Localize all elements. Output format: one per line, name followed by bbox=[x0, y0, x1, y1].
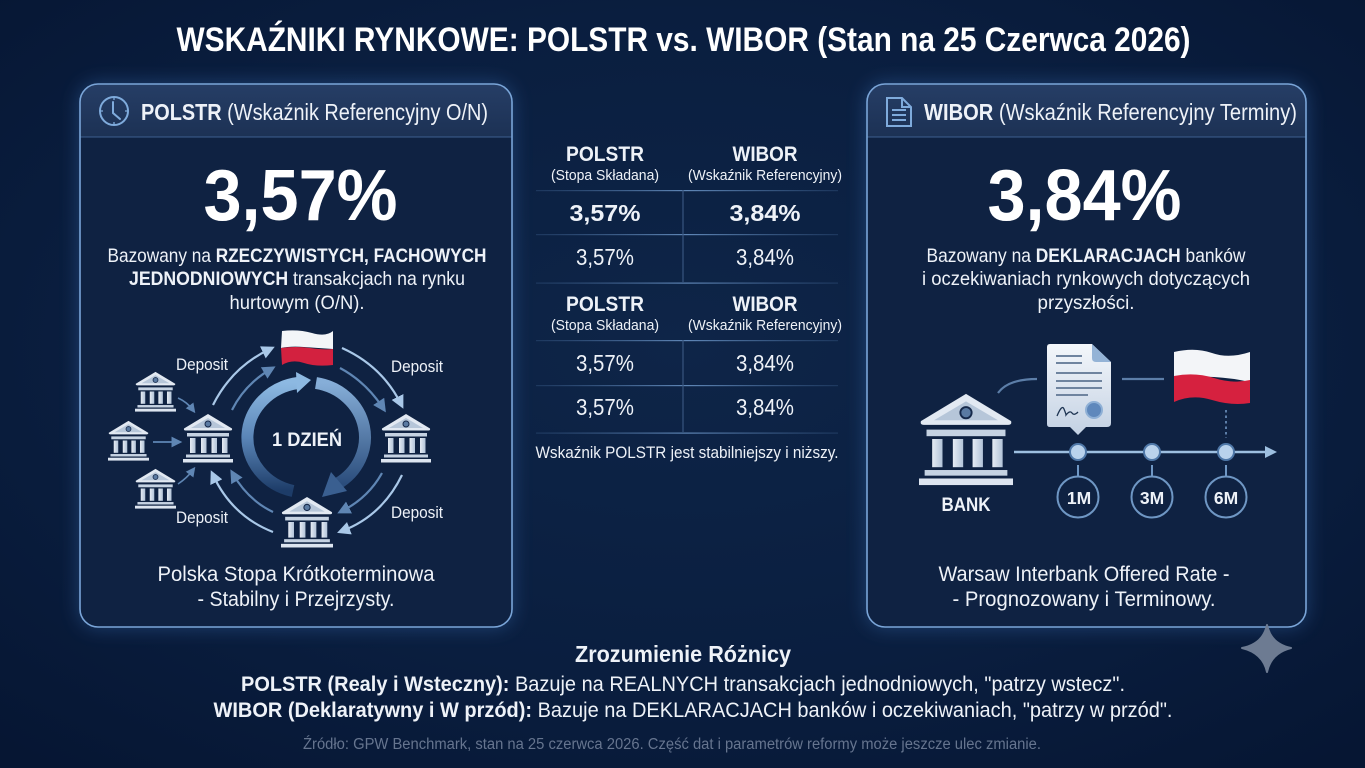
table rows 2 bbox=[576, 350, 794, 420]
description: WIBOR: przyszłości. bbox=[1038, 292, 1134, 314]
deposit labels: Deposit bbox=[391, 358, 443, 376]
icon: bank nodes bbox=[108, 372, 431, 547]
table header 1: WIBOR bbox=[732, 142, 798, 166]
description: POLSTR: hurtowym (O/N). bbox=[230, 292, 364, 314]
diagram: one-day cycle bbox=[108, 330, 443, 547]
deposit labels: Deposit bbox=[176, 509, 228, 527]
summary line WIBOR: WIBOR (Deklaratywny i W przód): Bazuje na DEKLARACJACH banków i oczekiwaniach, "patrzy w przód". bbox=[214, 698, 1172, 722]
description: POLSTR: Bazowany na RZECZYWISTYCH, FACHOWYCH bbox=[108, 245, 486, 267]
caption: POLSTR: - Stabilny i Przejrzysty. bbox=[198, 588, 394, 611]
summary line POLSTR: POLSTR (Realy i Wsteczny): Bazuje na REALNYCH transakcjach jednodniowych, "patrzy wstecz". bbox=[241, 672, 1125, 696]
panel header: WIBOR: WIBOR (Wskaźnik Referencyjny Terminy) bbox=[924, 99, 1297, 125]
table note: Wskaźnik POLSTR jest stabilniejszy i niższy. bbox=[536, 444, 838, 462]
summary heading: Zrozumienie Różnicy bbox=[575, 641, 791, 667]
table header 2: WIBOR bbox=[732, 292, 798, 316]
table rows 2: 3,57% bbox=[576, 350, 634, 376]
description: POLSTR: JEDNODNIOWYCH transakcjach na rynku bbox=[129, 268, 465, 290]
icon: document bbox=[887, 98, 911, 126]
description: WIBOR: Bazowany na DEKLARACJACH banków bbox=[926, 245, 1246, 267]
big value: POLSTR: 3,57% bbox=[204, 156, 398, 236]
source note: Źródło: GPW Benchmark, stan na 25 czerwca 2026. Część dat i parametrów reformy może jeszcze ulec zmianie. bbox=[303, 736, 1041, 753]
bank label: BANK bbox=[942, 494, 990, 516]
table header 1: (Wskaźnik Referencyjny) bbox=[688, 168, 842, 184]
icon: Polish flag bbox=[1174, 350, 1250, 404]
timeline: 6M bbox=[1214, 488, 1238, 508]
ring arrows bbox=[247, 372, 365, 497]
icon: bank bbox=[919, 394, 1013, 485]
deposit labels bbox=[176, 356, 443, 527]
table rows 1: 3,57% bbox=[570, 200, 641, 226]
timeline: 1M bbox=[1067, 488, 1091, 508]
table header 2 bbox=[551, 292, 842, 334]
caption: POLSTR: Polska Stopa Krótkoterminowa bbox=[158, 563, 435, 586]
timeline: 3M bbox=[1140, 488, 1164, 508]
table rows 2: 3,84% bbox=[736, 350, 794, 376]
icon: signed document bbox=[1047, 344, 1111, 435]
connectors bbox=[998, 379, 1226, 438]
icon: clock bbox=[100, 97, 128, 125]
table rows 1: 3,84% bbox=[730, 200, 801, 226]
big value: WIBOR: 3,84% bbox=[988, 156, 1182, 236]
description: WIBOR bbox=[922, 245, 1250, 314]
table header 1: POLSTR bbox=[566, 142, 644, 166]
timeline bbox=[1014, 444, 1277, 518]
icon: Polish flag bbox=[281, 330, 333, 366]
table rows 1 bbox=[570, 200, 801, 270]
panel header: POLSTR: POLSTR (Wskaźnik Referencyjny O/N) bbox=[141, 99, 488, 125]
table rows 2: 3,84% bbox=[736, 394, 794, 420]
table header 2: (Wskaźnik Referencyjny) bbox=[688, 318, 842, 334]
center label: 1 DZIEŃ bbox=[272, 428, 342, 451]
icon: sparkle bbox=[1242, 625, 1291, 672]
table header 1 bbox=[551, 142, 842, 184]
table rows 1: 3,57% bbox=[576, 244, 634, 270]
deposit labels: Deposit bbox=[391, 504, 443, 522]
panel: WIBOR bbox=[865, 82, 1308, 629]
comparison table bbox=[536, 142, 842, 462]
description: POLSTR bbox=[108, 245, 486, 314]
table header 2: POLSTR bbox=[566, 292, 644, 316]
circulating arrows bbox=[153, 348, 402, 532]
caption: WIBOR bbox=[938, 563, 1230, 611]
diagram: tenor timeline bbox=[919, 344, 1277, 518]
caption: POLSTR bbox=[158, 563, 435, 611]
title: WSKAŹNIKI RYNKOWE: POLSTR vs. WIBOR (Stan na 25 Czerwca 2026) bbox=[176, 21, 1190, 59]
table header 1: (Stopa Składana) bbox=[551, 168, 659, 184]
summary bbox=[214, 641, 1172, 753]
table rows 1: 3,84% bbox=[736, 244, 794, 270]
deposit labels: Deposit bbox=[176, 356, 228, 374]
description: WIBOR: i oczekiwaniach rynkowych dotyczących bbox=[922, 268, 1250, 290]
table header 2: (Stopa Składana) bbox=[551, 318, 659, 334]
panel: POLSTR bbox=[78, 82, 514, 629]
table rows 2: 3,57% bbox=[576, 394, 634, 420]
caption: WIBOR: Warsaw Interbank Offered Rate - bbox=[938, 563, 1230, 586]
caption: WIBOR: - Prognozowany i Terminowy. bbox=[952, 588, 1216, 611]
